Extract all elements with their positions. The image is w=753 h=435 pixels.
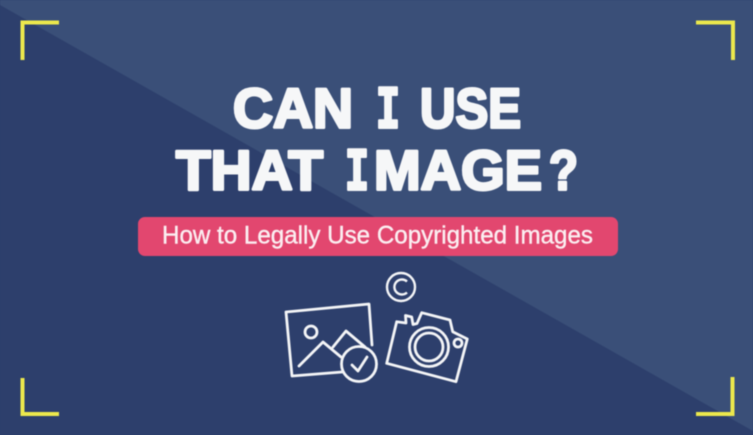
title: CAN <box>233 76 353 140</box>
title: ? <box>549 138 578 202</box>
corner bracket: bottom left <box>22 378 59 414</box>
icon: camera <box>387 313 467 382</box>
corner bracket: top right <box>696 22 733 60</box>
icon: picture with check badge <box>286 304 376 382</box>
title: MAGE <box>374 138 542 202</box>
subtitle banner: How to Legally Use Copyrighted Images <box>162 222 593 250</box>
title <box>176 76 578 208</box>
icon: copyright symbol <box>387 273 415 301</box>
title: I <box>345 140 369 208</box>
title: THAT <box>176 138 323 202</box>
title: USE <box>420 76 521 140</box>
subtitle banner <box>138 217 618 256</box>
title: I <box>376 78 400 146</box>
corner bracket: bottom right <box>696 377 732 414</box>
corner bracket: top left <box>22 22 59 60</box>
